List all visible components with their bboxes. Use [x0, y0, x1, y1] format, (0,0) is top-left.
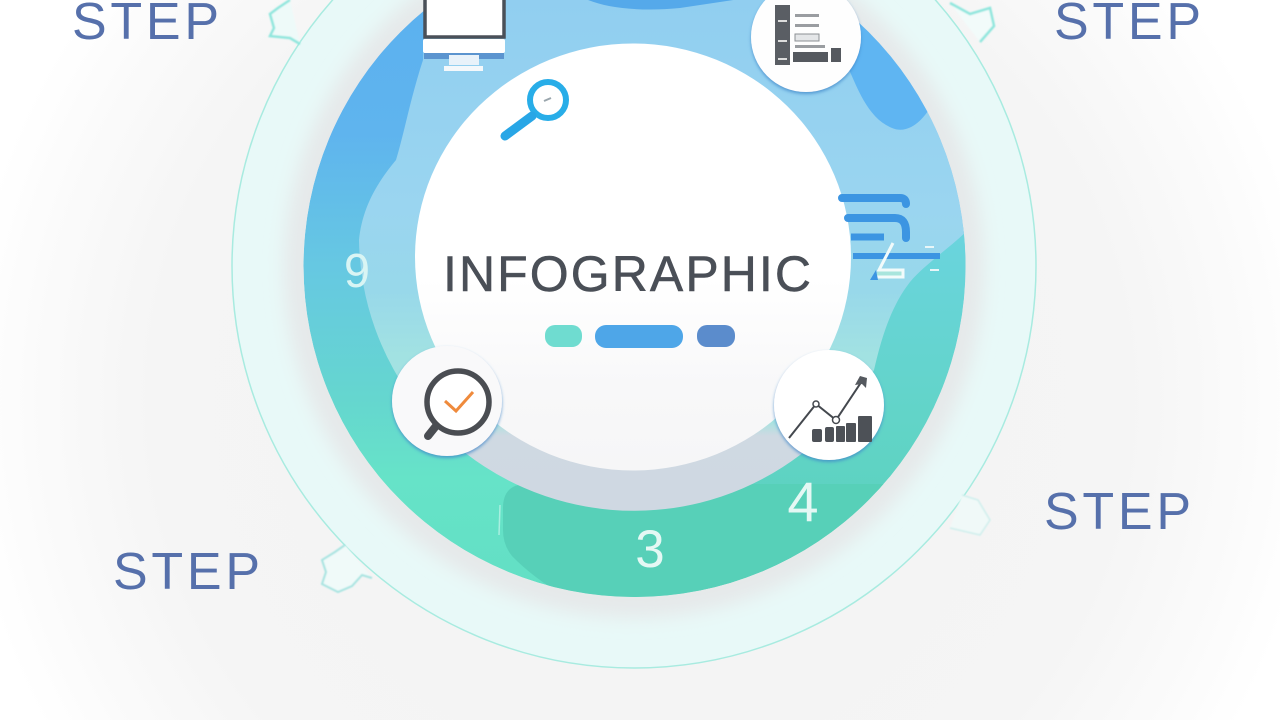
number 1: [499, 505, 500, 535]
outer ring: [232, 0, 1036, 668]
lighter inner band: [359, 0, 985, 511]
legend pills: [545, 325, 735, 348]
icon: blue magnifier: [505, 82, 566, 136]
number 3: 3: [635, 520, 665, 579]
icon: check magnifier circle: [392, 346, 502, 456]
right aqua area: [700, 225, 980, 605]
ring connector: bottom right: [950, 495, 990, 535]
center white circle: [415, 44, 851, 470]
ring connector: top left: [270, 0, 300, 44]
lower teal panel: [503, 484, 884, 597]
ring connector: top right: [950, 3, 994, 42]
number 2: 9: [344, 245, 370, 298]
label: step right: STEP: [1044, 483, 1191, 541]
ring connector: bottom left: [322, 545, 372, 592]
label: step bottom left: STEP: [113, 543, 260, 601]
colored ring disc: [304, 0, 985, 610]
icon: chart circle: [774, 350, 884, 460]
icon: document circle: [751, 0, 861, 92]
title: INFOGRAPHIC: [443, 246, 811, 302]
top right blue blob: [850, 23, 928, 130]
top blue blob: [588, 0, 733, 10]
number 4: 4: [787, 470, 819, 533]
icon: monitor: [423, 0, 505, 71]
icon: list lines: [842, 198, 940, 280]
